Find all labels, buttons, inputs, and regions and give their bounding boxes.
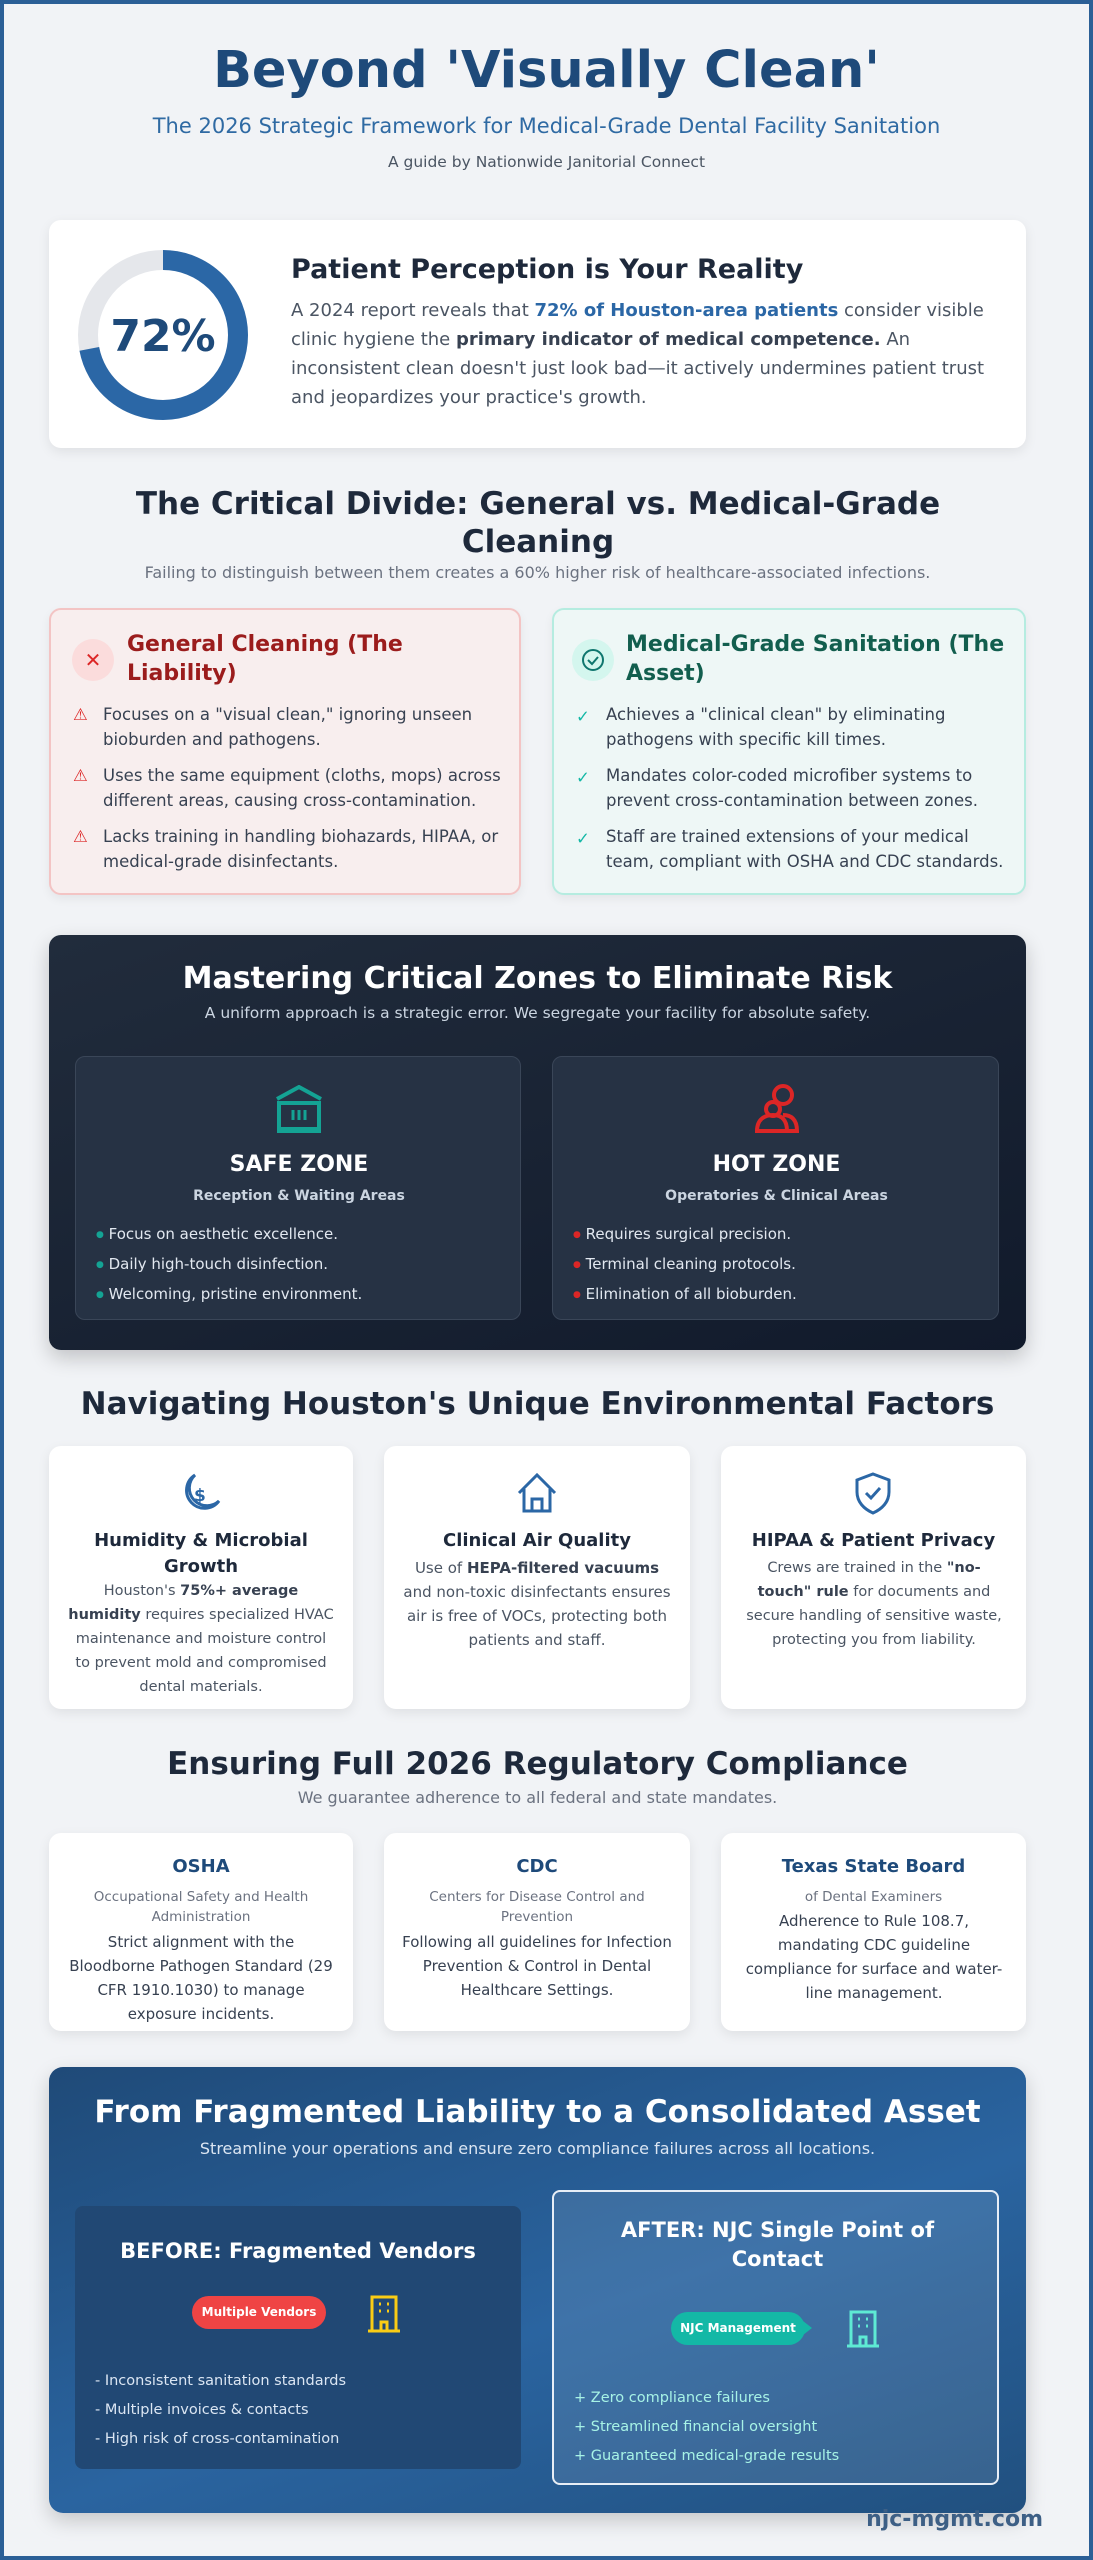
list: ⚠ [73, 827, 88, 846]
badge: NJC management: NJC Management [680, 2321, 796, 2335]
list: Lacks training in handling biohazards, HIPAA, or medical-grade disinfectants. [103, 827, 498, 871]
list: ✓ [576, 829, 590, 848]
zone list: ● Daily high-touch disinfection. [96, 1255, 328, 1273]
zone list: ● Focus on aesthetic excellence. [96, 1225, 338, 1243]
list: Focuses on a "visual clean," ignoring unseen bioburden and pathogens. [103, 705, 472, 749]
card: HIPAA [721, 1446, 1026, 1709]
before list: - Inconsistent sanitation standards [95, 2373, 346, 2389]
icon: check circle [572, 639, 614, 681]
after list: + Streamlined financial oversight [574, 2419, 817, 2435]
heading: environmental factors: Navigating Houston's Unique Environmental Factors [81, 1386, 994, 1422]
card: OSHA: Strict alignment with the Bloodborne Pathogen Standard (29 CFR 1910.1030) to manage exposure incidents. [69, 1933, 333, 2023]
zone list [573, 1225, 797, 1303]
icon: house [518, 1473, 556, 1512]
after list: + Zero compliance failures [574, 2390, 770, 2406]
card: OSHA: OSHA [172, 1856, 230, 1877]
card: humidity [49, 1446, 353, 1709]
card: Texas State Board [721, 1833, 1026, 2031]
card: CDC: CDC [516, 1856, 558, 1877]
card title: Medical-Grade Sanitation (The Asset) [626, 632, 1004, 686]
panel title: From Fragmented Liability to a Consolidated Asset [94, 2094, 981, 2130]
icon: building yellow [368, 2296, 400, 2332]
card: CDC: Centers for Disease Control and Prevention [429, 1889, 645, 1925]
list: ⚠ [73, 705, 88, 724]
panel: patient perception [49, 220, 1026, 448]
guide credit: A guide by Nationwide Janitorial Connect [388, 153, 705, 171]
zone list: ● Terminal cleaning protocols. [573, 1255, 796, 1273]
panel: consolidation [49, 2067, 1026, 2513]
zone list: ● Requires surgical precision. [573, 1225, 791, 1243]
list: ✓ [576, 768, 590, 787]
list: Staff are trained extensions of your medical team, compliant with OSHA and CDC standards. [606, 827, 1003, 871]
icon: shield [856, 1472, 890, 1515]
after list [574, 2390, 839, 2464]
card title: General Cleaning (The Liability) [127, 632, 403, 686]
card: Texas State Board: of Dental Examiners [805, 1889, 942, 1905]
list [576, 705, 1003, 871]
donut chart 72%: 72% [110, 311, 216, 362]
card: OSHA: Occupational Safety and Health Administration [94, 1889, 308, 1925]
after box: AFTER: NJC Single Point of Contact [621, 2218, 934, 2271]
title: Humidity & Microbial Growth [94, 1530, 308, 1577]
zone area: Operatories & Clinical Areas [665, 1188, 888, 1204]
list: ⚠ [73, 766, 88, 785]
before box: BEFORE: Fragmented Vendors [120, 2239, 476, 2263]
before list [95, 2373, 346, 2447]
card: CDC: Following all guidelines for Infection Prevention & Control in Dental Healthcare Settings. [402, 1933, 672, 1999]
list [73, 705, 501, 871]
icon: x [72, 639, 114, 681]
list: Uses the same equipment (cloths, mops) across different areas, causing cross-contamination. [103, 766, 501, 810]
panel subtitle: Streamline your operations and ensure zero compliance failures across all locations. [200, 2139, 875, 2158]
zones subtitle: A uniform approach is a strategic error. We segregate your facility for absolute safety. [205, 1004, 870, 1022]
body: Crews are trained in the "no-touch" rule for documents and secure handling of sensitive waste, protecting you from liability. [746, 1560, 1002, 1648]
badge: NJC management [671, 2312, 805, 2345]
panel: medical-grade [552, 608, 1026, 895]
subheading: We guarantee adherence to all federal and state mandates. [298, 1788, 777, 1807]
card: air quality [384, 1446, 690, 1709]
list: ✓ [576, 707, 590, 726]
icon: moon humidity [185, 1474, 220, 1510]
icon: x: ✕ [85, 648, 101, 672]
before list: - Multiple invoices & contacts [95, 2402, 309, 2418]
footer url: njc-mgmt.com [866, 2507, 1043, 2532]
heading: compliance: Ensuring Full 2026 Regulatory Compliance [167, 1746, 908, 1782]
card: Texas State Board: Texas State Board [782, 1856, 965, 1877]
icon: moon humidity: $ [194, 1486, 206, 1506]
icon: biohazard people [755, 1084, 799, 1133]
title: Clinical Air Quality [443, 1530, 631, 1551]
heading: Patient Perception is Your Reality [291, 254, 803, 285]
zone name: HOT ZONE [713, 1152, 840, 1177]
badge: multiple vendors [192, 2296, 326, 2329]
badge: multiple vendors: Multiple Vendors [202, 2305, 316, 2319]
zone name: SAFE ZONE [230, 1152, 368, 1177]
body text: A 2024 report reveals that 72% of Houston-area patients consider visible clinic hygiene the primary indicator of medical competence. An inconsistent clean doesn't just look bad—it actively undermines patient trust and jeopardizes your practice's growth. [291, 300, 984, 408]
card: hot zone [552, 1056, 999, 1320]
before box [75, 2206, 521, 2469]
donut chart 72% [78, 250, 248, 420]
panel: critical zones [49, 935, 1026, 1350]
icon: building teal [847, 2310, 879, 2348]
card: OSHA [49, 1833, 353, 2031]
card: CDC [384, 1833, 690, 2031]
zones title: Mastering Critical Zones to Eliminate Risk [183, 961, 892, 996]
heading: critical divide: The Critical Divide: General vs. Medical-Grade Cleaning [136, 486, 940, 560]
subtitle: The 2026 Strategic Framework for Medical-Grade Dental Facility Sanitation [153, 114, 940, 138]
after box [552, 2190, 999, 2485]
subheading: Failing to distinguish between them creates a 60% higher risk of healthcare-associated infections. [145, 563, 930, 582]
icon: building [276, 1085, 322, 1133]
title: HIPAA & Patient Privacy [752, 1530, 995, 1551]
card: safe zone [75, 1056, 521, 1320]
zone area: Reception & Waiting Areas [193, 1188, 405, 1204]
title: Beyond 'Visually Clean' [213, 41, 880, 100]
list: Mandates color-coded microfiber systems to prevent cross-contamination between zones. [606, 766, 978, 810]
after list: + Guaranteed medical-grade results [574, 2448, 839, 2464]
zone list: ● Elimination of all bioburden. [573, 1285, 797, 1303]
list: Achieves a "clinical clean" by eliminating pathogens with specific kill times. [606, 705, 945, 749]
panel: general cleaning [49, 608, 521, 895]
card: Texas State Board: Adherence to Rule 108.7, mandating CDC guideline compliance for surface and water-line management. [746, 1912, 1002, 2002]
body: Use of HEPA-filtered vacuums and non-toxic disinfectants ensures air is free of VOCs, protecting both patients and staff. [403, 1559, 671, 1649]
before list: - High risk of cross-contamination [95, 2431, 339, 2447]
zone list: ● Welcoming, pristine environment. [96, 1285, 362, 1303]
body: Houston's 75%+ average humidity requires specialized HVAC maintenance and moisture control to prevent mold and compromised dental materials. [68, 1583, 334, 1695]
arrow [803, 2321, 812, 2335]
zone list [96, 1225, 362, 1303]
